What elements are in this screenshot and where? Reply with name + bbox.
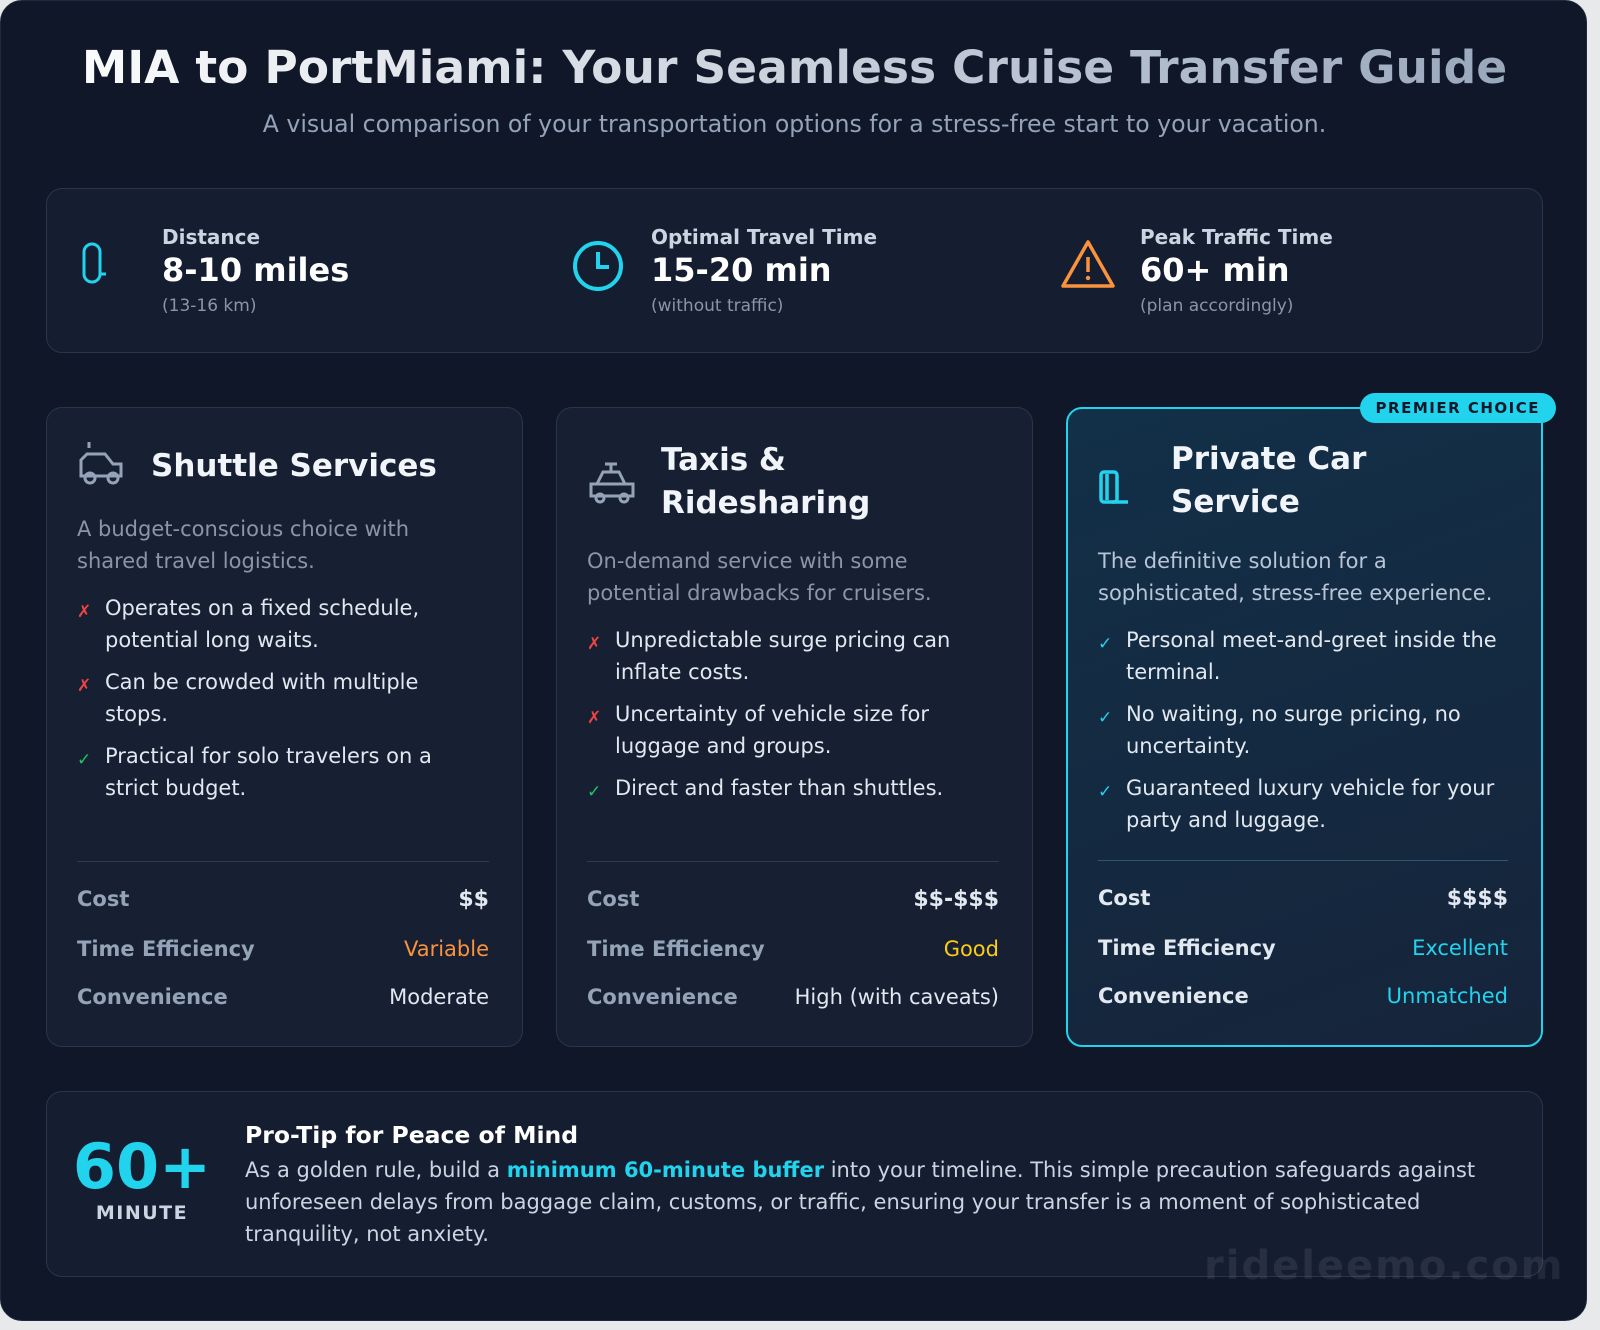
heading xyxy=(1171,441,1366,520)
stat: distance: 8-10 miles xyxy=(162,251,349,289)
badge: premier choice: PREMIER CHOICE xyxy=(1376,399,1540,417)
panel: shuttle services: Moderate xyxy=(389,985,489,1009)
stat: peak traffic: Peak Traffic Time xyxy=(1140,225,1333,249)
list: pros and cons: ✓ xyxy=(587,782,601,802)
icon: warning xyxy=(1061,240,1115,288)
panel: private car service: Cost xyxy=(1098,886,1150,910)
heading: Service xyxy=(1171,484,1300,520)
heading: Taxis & xyxy=(661,442,786,478)
list: pros and cons: Uncertainty of vehicle size for luggage and groups. xyxy=(615,702,929,758)
heading xyxy=(661,442,870,521)
list: pros and cons: ✗ xyxy=(77,676,91,696)
icon: private car xyxy=(1099,470,1128,504)
icon: shuttle xyxy=(80,442,122,484)
stat: distance xyxy=(82,225,349,316)
panel: taxis & ridesharing: $$-$$$ xyxy=(913,887,999,912)
panel: shuttle services: $$ xyxy=(458,887,489,912)
metrics xyxy=(1098,860,1508,861)
list: benefits: ✓ xyxy=(1098,634,1112,654)
list: pros and cons: Practical for solo travelers on a strict budget. xyxy=(105,744,432,800)
panel: shuttle services: Cost xyxy=(77,887,129,911)
list: benefits xyxy=(1098,628,1497,832)
stat: 60+ minute: 60+ xyxy=(73,1130,211,1203)
panel: key stats xyxy=(46,188,1543,353)
watermark: rideleemo.com xyxy=(1204,1243,1564,1289)
list: benefits: ✓ xyxy=(1098,782,1112,802)
list: pros and cons: Operates on a fixed schedule, potential long waits. xyxy=(105,596,419,652)
stat: peak traffic: 60+ min xyxy=(1140,251,1290,289)
stat: peak traffic: (plan accordingly) xyxy=(1140,296,1293,316)
panel: private car service: Excellent xyxy=(1412,936,1508,960)
icon: route xyxy=(82,242,106,284)
panel: private car service: Unmatched xyxy=(1387,984,1508,1008)
panel: taxis & ridesharing: Good xyxy=(944,937,999,961)
stat: optimal travel time xyxy=(573,225,877,316)
heading: Pro-Tip for Peace of Mind xyxy=(245,1121,578,1149)
list: pros and cons: Direct and faster than shuttles. xyxy=(615,776,943,800)
metrics xyxy=(77,861,489,862)
panel: shuttle services: Variable xyxy=(404,937,489,961)
stat: distance: Distance xyxy=(162,225,260,249)
list: pros and cons: ✗ xyxy=(587,634,601,654)
stat: optimal travel time: Optimal Travel Time xyxy=(651,225,877,249)
heading: Private Car xyxy=(1171,441,1366,477)
list: benefits: Guaranteed luxury vehicle for your party and luggage. xyxy=(1126,776,1494,832)
badge: premier choice xyxy=(1360,393,1556,423)
stat: optimal travel time: 15-20 min xyxy=(651,251,832,289)
panel: shuttle services: Convenience xyxy=(77,985,228,1009)
panel: private car service: $$$$ xyxy=(1447,886,1508,911)
list: benefits: ✓ xyxy=(1098,708,1112,728)
panel: taxis & ridesharing: Cost xyxy=(587,887,639,911)
panel: shuttle services: Time Efficiency xyxy=(77,937,255,961)
list: pros and cons xyxy=(77,596,432,800)
list: benefits: Personal meet-and-greet inside the terminal. xyxy=(1126,628,1497,684)
panel: taxis & ridesharing: Convenience xyxy=(587,985,738,1009)
list: pros and cons: Unpredictable surge pricing can inflate costs. xyxy=(615,628,950,684)
heading: Ridesharing xyxy=(661,485,870,521)
panel: private car service: Time Efficiency xyxy=(1098,936,1276,960)
list: pros and cons: ✗ xyxy=(77,602,91,622)
list: pros and cons: Can be crowded with multiple stops. xyxy=(105,670,418,726)
list: benefits: No waiting, no surge pricing, no uncertainty. xyxy=(1126,702,1461,758)
description: On-demand service with some potential drawbacks for cruisers. xyxy=(587,549,932,605)
metrics xyxy=(587,861,999,862)
stat: optimal travel time: (without traffic) xyxy=(651,296,783,316)
list: pros and cons xyxy=(587,628,950,802)
panel: private car service xyxy=(1066,407,1543,1047)
list: pros and cons: ✓ xyxy=(77,750,91,770)
icon: clock xyxy=(573,241,623,291)
icon: taxi xyxy=(590,462,634,504)
stat: 60+ minute: MINUTE xyxy=(96,1202,188,1224)
panel: shuttle services xyxy=(46,407,523,1047)
panel: private car service: Convenience xyxy=(1098,984,1249,1008)
description: The definitive solution for a sophisticated, stress-free experience. xyxy=(1098,549,1492,605)
panel: taxis & ridesharing: High (with caveats) xyxy=(795,985,999,1009)
panel: pro tip xyxy=(46,1091,1543,1277)
text block: As a golden rule, build a minimum 60-minute buffer into your timeline. This simple precaution safeguards against unforeseen delays from baggage claim, customs, or traffic, ensuring your transfer is a moment of sophisticated tranquility, not anxiety. xyxy=(245,1158,1475,1246)
stat: peak traffic xyxy=(1061,225,1333,316)
panel: taxis & ridesharing xyxy=(556,407,1033,1047)
subtitle: A visual comparison of your transportation options for a stress-free start to your vacation. xyxy=(263,110,1326,138)
description: A budget-conscious choice with shared travel logistics. xyxy=(77,517,409,573)
list: pros and cons: ✗ xyxy=(587,708,601,728)
stat: distance: (13-16 km) xyxy=(162,296,256,316)
heading: Shuttle Services xyxy=(151,448,437,484)
panel: taxis & ridesharing: Time Efficiency xyxy=(587,937,765,961)
title: MIA to PortMiami: Your Seamless Cruise Transfer Guide xyxy=(82,41,1507,94)
